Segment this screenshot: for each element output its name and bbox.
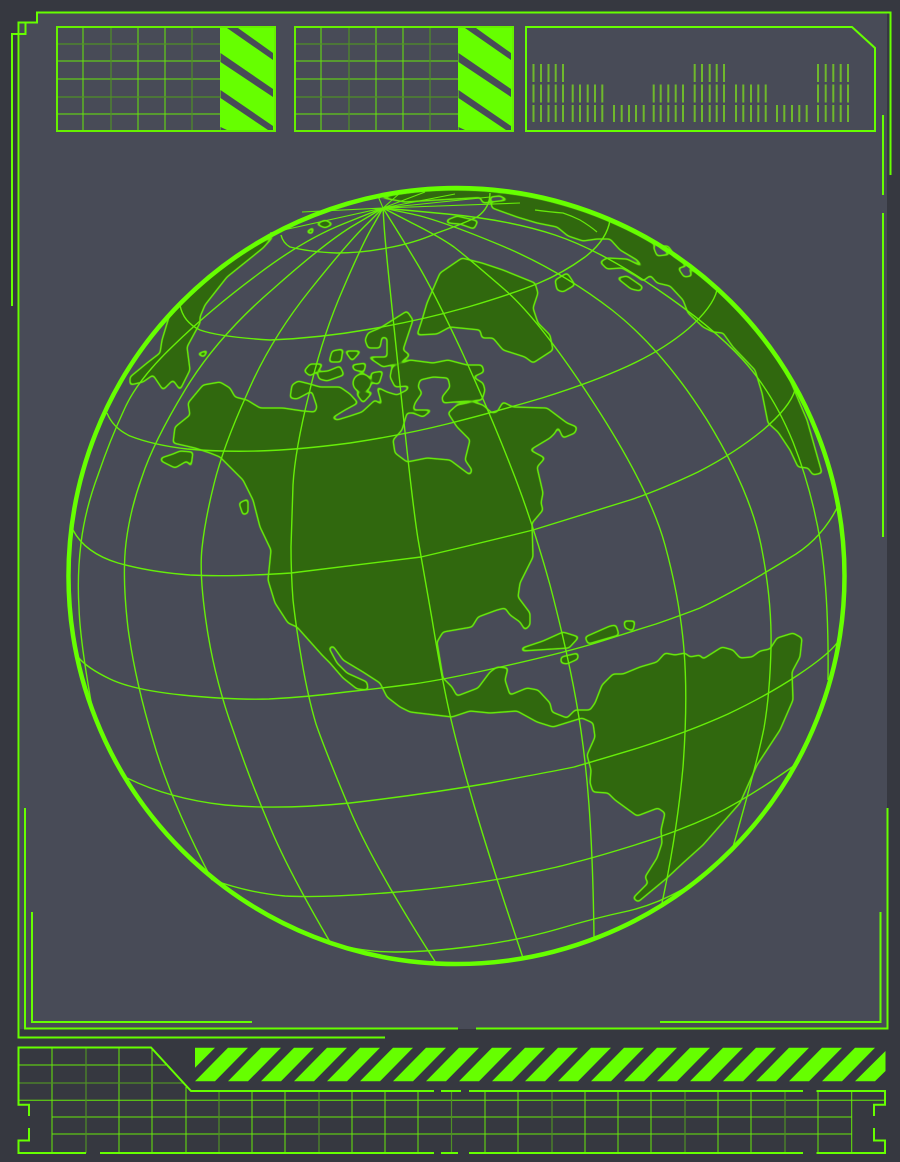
panel: top left grid with hazard block — [57, 27, 275, 131]
grid lines — [18, 1047, 885, 1153]
panel: bottom hazard stripes — [195, 1048, 886, 1081]
map: parallels — [73, 193, 837, 952]
land: arctic islands — [304, 349, 383, 403]
chart: globe — [68, 188, 844, 964]
panel: top middle grid with hazard block — [295, 27, 513, 131]
land: Aleutians and Vancouver island — [161, 350, 248, 515]
panel: top right bar readout — [526, 27, 875, 131]
land: coast detail line — [535, 210, 597, 232]
land: Eurasia along the limb — [130, 190, 822, 475]
land: North and South America — [173, 360, 802, 902]
land: Iceland — [555, 273, 575, 292]
map: continents — [130, 190, 822, 902]
panel: bottom grid console — [18, 1047, 885, 1153]
map: meridians — [78, 192, 828, 963]
globe outline — [68, 188, 844, 964]
chart: tick columns — [534, 64, 848, 122]
land: Caribbean islands — [522, 621, 635, 664]
console outline — [18, 1048, 885, 1153]
land: Greenland — [417, 258, 553, 363]
land: Ellesmere island — [365, 311, 413, 367]
land: northern Eurasian islands — [306, 216, 651, 291]
